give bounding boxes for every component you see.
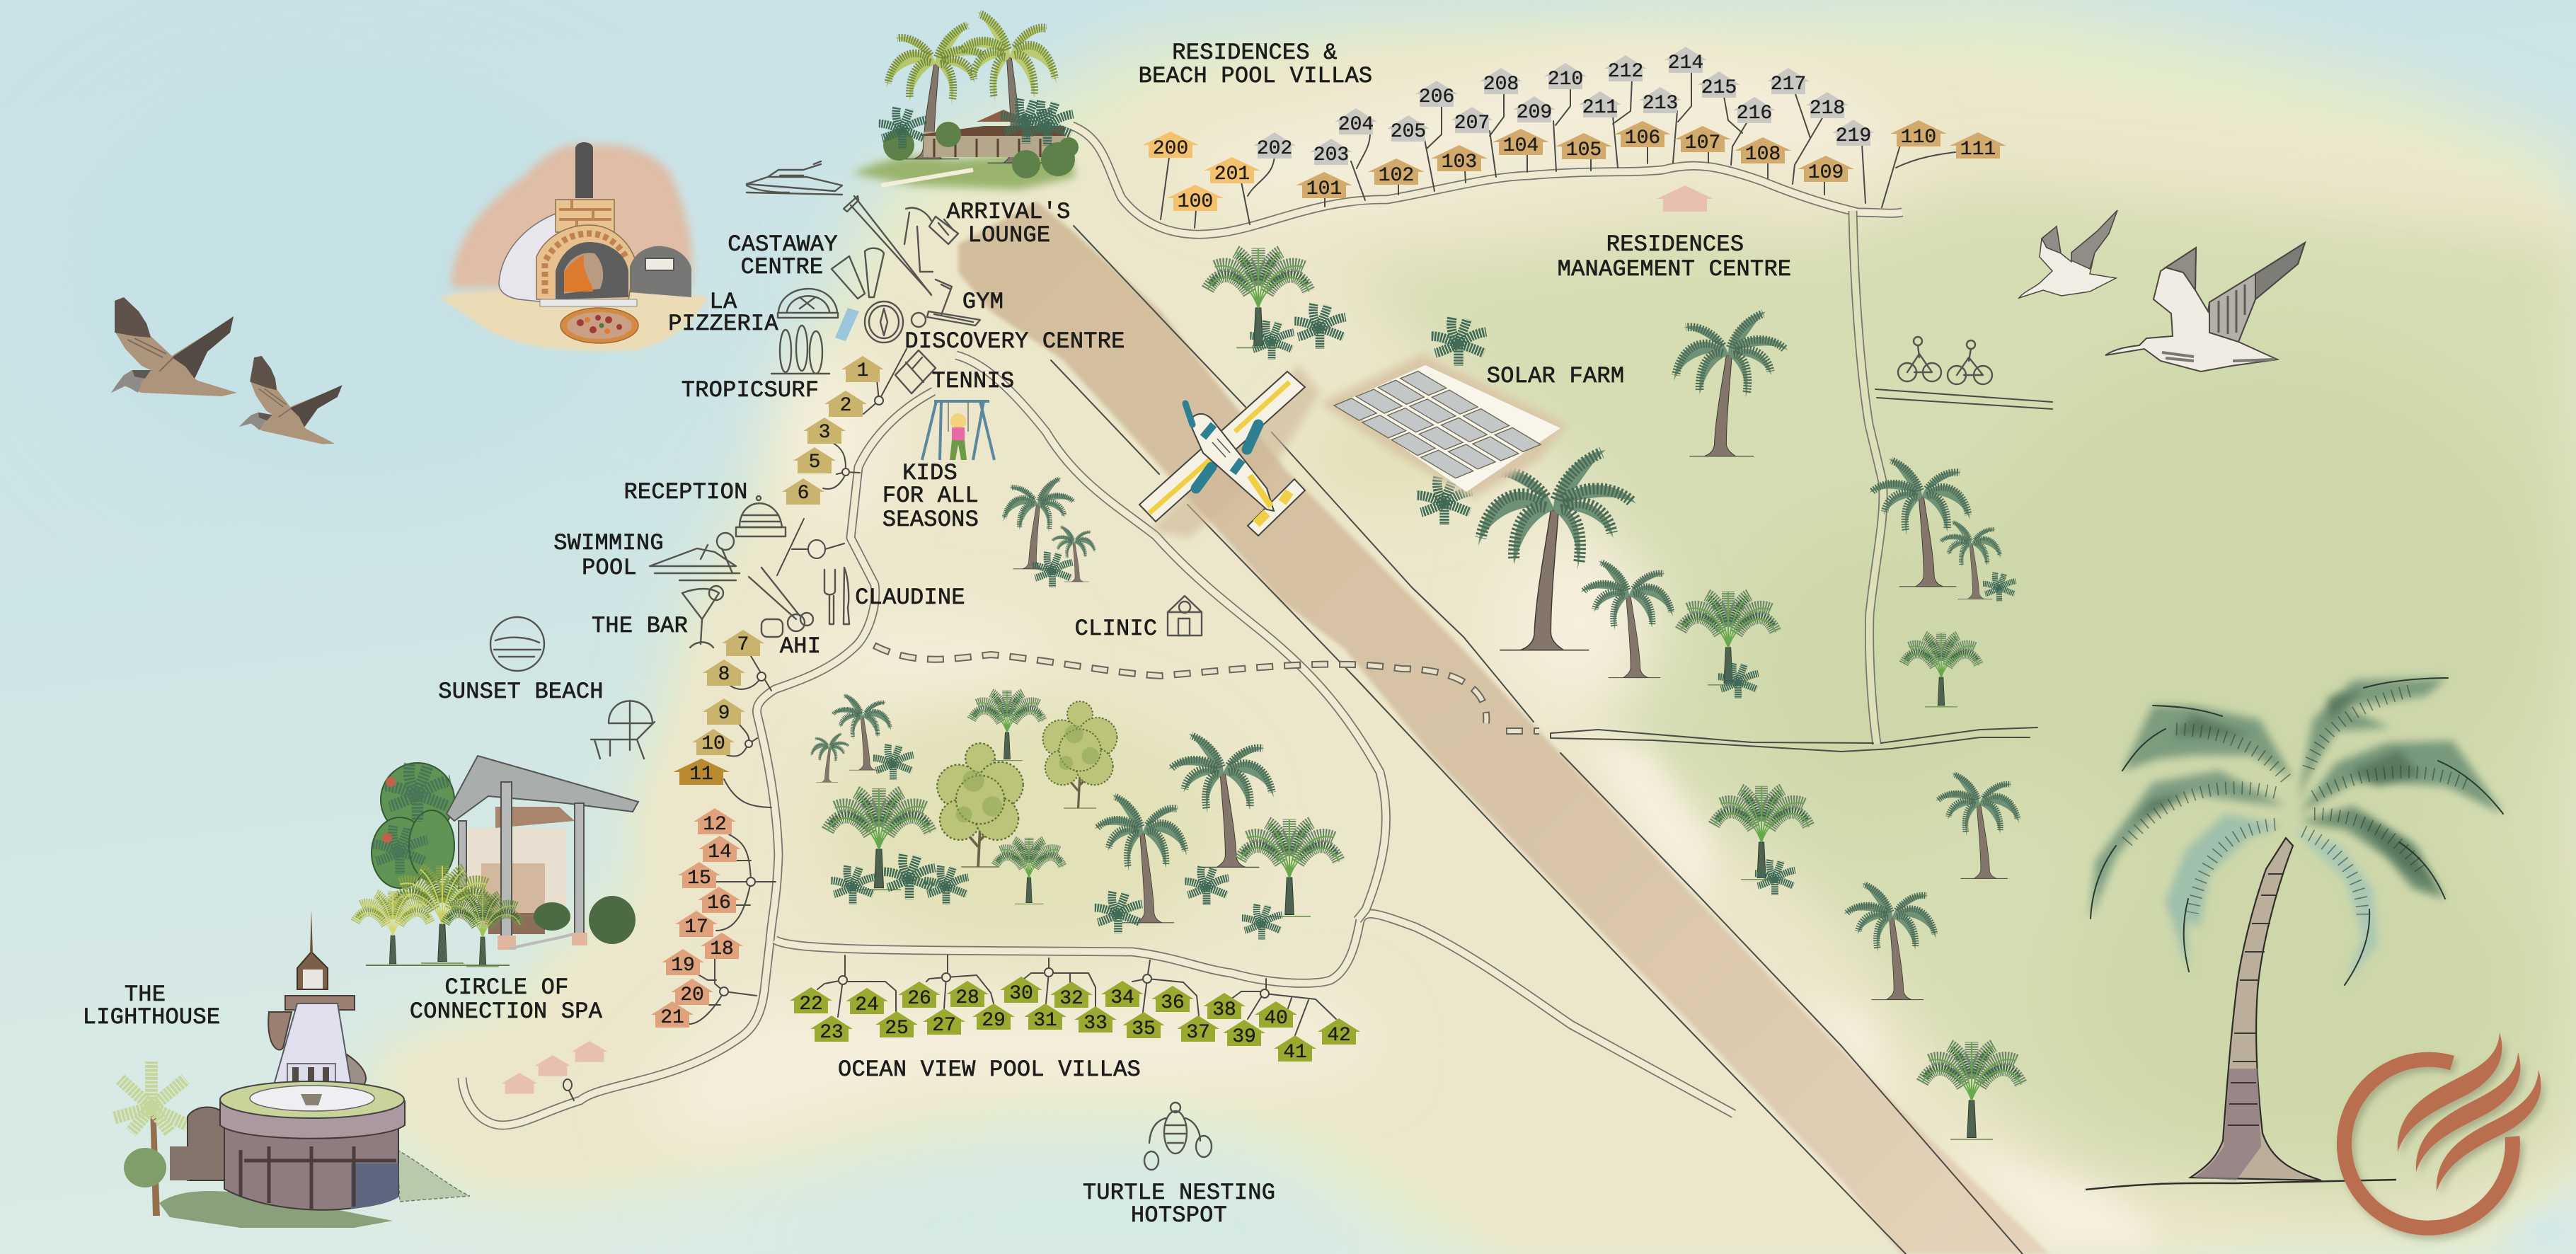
icon: gym treadmill xyxy=(927,280,980,326)
house markers: residences grey: 210 xyxy=(1548,69,1583,91)
blue water wash xyxy=(57,85,1415,1254)
house markers: beach pool villas: 200 xyxy=(1153,138,1188,160)
label: reception: RECEPTION xyxy=(623,479,748,505)
house markers: residences tan: 108 xyxy=(1745,144,1781,166)
oven smoke wash xyxy=(451,144,692,288)
house markers: spa villas salmon: 18 xyxy=(710,938,734,960)
house markers: residences grey: 205 xyxy=(1391,121,1426,143)
house markers: residences grey: 208 xyxy=(1483,74,1519,96)
residence villa markers xyxy=(1142,47,2006,213)
house markers: residences tan: 106 xyxy=(1625,127,1660,149)
ground line xyxy=(2086,1180,2396,1190)
dashed track xyxy=(874,645,1539,731)
oven sand wash xyxy=(439,287,708,351)
icon: beach umbrella and chair xyxy=(591,701,655,759)
house markers: spa villas salmon: 20 xyxy=(680,984,704,1006)
house markers: ocean view pool villas: 39 xyxy=(1232,1026,1256,1048)
bottom-right water xyxy=(2498,1196,2576,1254)
icon: reception bell xyxy=(736,496,786,536)
label: kids for all seasons: SEASONS xyxy=(882,507,979,533)
frond B xyxy=(2091,771,2286,919)
label: discovery centre: DISCOVERY CENTRE xyxy=(904,328,1125,355)
house markers: ocean view pool villas: 40 xyxy=(1264,1008,1288,1030)
lighthouse vegetation xyxy=(159,1191,393,1228)
icon: swim fins xyxy=(832,248,884,299)
la pizzeria oven illustration xyxy=(439,142,708,351)
road: to villa 111 xyxy=(1896,152,1955,168)
label: arrival's lounge xyxy=(946,199,1071,248)
house markers: beach villas gold: 3 xyxy=(819,422,830,444)
house markers: ocean view pool villas: 30 xyxy=(1009,983,1033,1005)
label: the lighthouse xyxy=(83,982,220,1030)
house markers: beach villas gold: 10 xyxy=(701,733,725,755)
wings xyxy=(1139,372,1305,522)
house markers: beach villas gold: 8 xyxy=(718,664,730,686)
house markers: lighthouse cottages xyxy=(501,1041,607,1094)
label: ocean view pool villas: OCEAN VIEW POOL VILLAS xyxy=(838,1057,1141,1083)
icon: chopsticks and sushi xyxy=(749,568,813,637)
house markers: beach pool villas: 100 xyxy=(1178,191,1213,213)
label: la pizzeria: PIZZERIA xyxy=(668,311,778,337)
house markers: residences grey xyxy=(1253,47,1875,166)
ocean villa leader lines xyxy=(817,955,1336,1035)
green inland wash xyxy=(1345,184,2576,1203)
house markers: ocean view pool villas: 42 xyxy=(1327,1025,1351,1047)
house markers: residences grey: 211 xyxy=(1582,97,1618,119)
road network xyxy=(462,126,2052,1125)
house marker: 11 xyxy=(673,759,730,786)
house markers: residences grey: 217 xyxy=(1771,74,1806,96)
house markers: residences tan: 101 xyxy=(1306,178,1342,200)
blue pool rectangle xyxy=(835,308,859,341)
plane shadow xyxy=(1150,364,1320,538)
fan palms xyxy=(827,248,2021,1139)
icon: compass xyxy=(865,301,926,343)
seaplane xyxy=(1139,364,1320,538)
label: arrival's lounge: ARRIVAL'S xyxy=(946,199,1071,225)
propeller xyxy=(1185,403,1192,425)
icon: tennis court xyxy=(895,350,936,393)
oven plinth xyxy=(540,299,637,306)
frond wash xyxy=(2091,678,2503,985)
solar farm ground xyxy=(1320,354,1568,499)
label: arrival's lounge: LOUNGE xyxy=(968,222,1050,248)
house markers: residences grey: 209 xyxy=(1517,102,1552,124)
house markers: spa villas salmon: 19 xyxy=(671,955,695,977)
label: circle of connection spa: CONNECTION SPA xyxy=(410,999,603,1025)
frond E xyxy=(2299,806,2445,899)
house markers: residences tan: 109 xyxy=(1808,162,1844,184)
label: residences management centre: RESIDENCES xyxy=(1606,231,1744,258)
label: circle of connection spa: CIRCLE OF xyxy=(444,974,569,1001)
label: the bar: THE BAR xyxy=(592,613,688,639)
road: east track xyxy=(1551,727,2037,752)
house markers: residences tan: 102 xyxy=(1379,165,1414,187)
pizza xyxy=(560,308,638,343)
house markers: ocean view pool villas: 34 xyxy=(1110,987,1134,1009)
label: residences and beach pool villas: BEACH POOL VILLAS xyxy=(1139,63,1372,89)
icon: paddle xyxy=(844,196,931,295)
house markers: ocean view pool villas: 32 xyxy=(1059,988,1083,1010)
icon: pool lounger xyxy=(650,533,740,580)
label: turtle nesting hotspot xyxy=(1083,1180,1275,1229)
road: central diagonal xyxy=(956,355,1386,920)
house markers: residences grey: 204 xyxy=(1338,114,1374,136)
label: the lighthouse: THE xyxy=(125,982,166,1008)
lounge building xyxy=(920,110,1065,157)
small drum xyxy=(188,1107,226,1180)
house markers: beach villas gold: 1 xyxy=(857,360,868,382)
birds: left pair xyxy=(111,297,347,447)
house markers: residences grey: 207 xyxy=(1454,113,1490,134)
house markers: ocean view pool villas: 23 xyxy=(820,1022,844,1044)
icon: turtles xyxy=(1144,1103,1212,1170)
label: solar farm: SOLAR FARM xyxy=(1487,363,1624,389)
fuselage xyxy=(1189,414,1274,511)
label: gym: GYM xyxy=(962,289,1004,315)
label: clinic: CLINIC xyxy=(1075,616,1157,642)
house markers: residences grey: 203 xyxy=(1313,144,1349,166)
label: swimming pool: POOL xyxy=(582,555,637,581)
frond D xyxy=(2293,829,2378,985)
label: claudine: CLAUDINE xyxy=(855,585,965,611)
label: circle of connection spa xyxy=(410,974,603,1025)
frond hatching xyxy=(2127,690,2470,920)
house markers: ocean view pool villas: 41 xyxy=(1283,1042,1307,1064)
arrivals lounge illustration xyxy=(852,12,1079,190)
deeper green right wash xyxy=(1734,347,2562,1154)
house markers: beach villas gold: 6 xyxy=(798,483,809,505)
road: cycle branch xyxy=(1875,389,2052,409)
spiral stair and balcony xyxy=(268,996,355,1049)
house markers: beach villas gold: 5 xyxy=(809,451,820,473)
label: kids for all seasons xyxy=(882,460,979,533)
big foreground palm xyxy=(2086,678,2503,1190)
icon: arrivals suitcase xyxy=(904,208,958,272)
label: castaway centre: CASTAWAY xyxy=(728,231,838,258)
spa tree xyxy=(372,763,454,888)
label: tropicsurf: TROPICSURF xyxy=(682,377,819,403)
coconut palms xyxy=(811,311,2019,1000)
left dome xyxy=(499,214,566,304)
house markers: beach villas gold: 9 xyxy=(718,703,730,725)
frond G xyxy=(2298,678,2446,803)
left forest wash xyxy=(821,403,1472,948)
house markers: ocean view pool villas: 27 xyxy=(932,1015,956,1037)
icon: surfboards xyxy=(771,326,829,374)
label: residences and beach pool villas xyxy=(1139,40,1372,89)
frond F xyxy=(2299,741,2503,814)
trunk xyxy=(2190,838,2321,1180)
house markers: residences tan xyxy=(1296,120,2006,200)
house markers: spa villas salmon: 14 xyxy=(708,841,732,863)
spa interior xyxy=(459,828,566,920)
label: swimming pool: SWIMMING xyxy=(553,530,664,556)
label: castaway centre: CENTRE xyxy=(741,254,823,280)
frond A xyxy=(2122,706,2293,778)
bird 1 xyxy=(111,297,237,396)
house markers: beach villas gold: 2 xyxy=(840,395,851,417)
leafy trees xyxy=(937,701,1117,867)
logo flames xyxy=(2398,1032,2502,1152)
icon: pizzeria arch xyxy=(778,289,838,318)
oven right door xyxy=(630,246,691,297)
house markers: residences tan: 105 xyxy=(1566,139,1602,161)
bird 2 xyxy=(238,355,347,447)
residence leader lines xyxy=(1161,71,1900,228)
house markers: residences tan: 104 xyxy=(1503,135,1539,157)
house markers: ocean view pool villas: 26 xyxy=(907,988,931,1010)
house markers: ocean view pool villas: 38 xyxy=(1212,999,1236,1021)
icon: martini xyxy=(682,586,723,648)
lounge shrubs xyxy=(883,122,1079,178)
house markers: ocean view pool villas: 31 xyxy=(1033,1010,1057,1032)
oven mouth with fire xyxy=(564,253,603,294)
road: west main xyxy=(462,391,933,1125)
label: sunset beach: SUNSET BEACH xyxy=(438,679,604,705)
small bushes xyxy=(831,304,2016,940)
dark frond shading xyxy=(2130,690,2434,888)
house marker: 11: 11 xyxy=(689,764,713,786)
house markers: residences tan: 103 xyxy=(1442,151,1477,173)
label: turtle nesting hotspot: HOTSPOT xyxy=(1131,1202,1227,1229)
the lighthouse illustration xyxy=(113,909,470,1228)
road: ocean villas xyxy=(775,914,1734,1114)
house markers: ocean view pool villas: 22 xyxy=(799,994,823,1016)
labels xyxy=(83,40,1791,1229)
brick block xyxy=(556,200,614,232)
house markers: beach villas gold: 7 xyxy=(737,634,749,656)
house markers: ocean view pool villas: 24 xyxy=(855,994,879,1016)
lounge palms xyxy=(886,23,990,159)
solar panels xyxy=(1334,372,1541,479)
oven door frame xyxy=(556,242,628,299)
icon: swing with child xyxy=(922,401,994,460)
frond C xyxy=(2166,814,2283,972)
chimney xyxy=(575,142,593,198)
house markers: spa villas salmon: 21 xyxy=(660,1007,684,1029)
icon: fork and knife xyxy=(824,568,849,624)
spa foliage xyxy=(393,866,492,963)
house markers: residences grey: 213 xyxy=(1643,93,1678,115)
solar farm xyxy=(1320,354,1568,499)
house markers: spa villas salmon: 15 xyxy=(687,868,711,890)
house markers: residences tan: 110 xyxy=(1901,127,1936,149)
house markers: residences tan: 107 xyxy=(1685,132,1720,154)
label: castaway centre xyxy=(728,231,838,280)
lollipop path marker xyxy=(563,1079,574,1100)
road: residences xyxy=(1072,126,1902,234)
house markers: beach pool villas: 201 xyxy=(1214,163,1250,185)
bird 4 xyxy=(2105,243,2305,372)
house markers: spa villas salmon: 16 xyxy=(707,892,731,914)
frond tip strands xyxy=(2091,678,2503,985)
house markers: spa villas salmon: 12 xyxy=(703,814,727,836)
brand logo xyxy=(2344,1032,2541,1228)
label: la pizzeria: LA xyxy=(710,289,737,315)
label: tennis: TENNIS xyxy=(932,368,1014,394)
brick arch xyxy=(536,225,635,301)
house markers: beach villas gold xyxy=(692,356,884,755)
house markers: ocean view pool villas: 29 xyxy=(982,1010,1006,1032)
label: residences management centre xyxy=(1558,231,1791,282)
house markers: residences grey: 218 xyxy=(1810,98,1845,120)
lighthouse small palm xyxy=(150,1104,160,1216)
house markers: residences grey: 206 xyxy=(1419,86,1454,108)
spa roof xyxy=(447,756,638,821)
house markers: residences grey: 214 xyxy=(1668,52,1703,74)
house markers: ocean view pool villas: 36 xyxy=(1161,992,1185,1014)
icon: boat xyxy=(747,161,842,195)
label: residences and beach pool villas: RESIDENCES & xyxy=(1172,40,1338,66)
house markers: ocean view pool villas: 25 xyxy=(885,1018,909,1040)
circle of connection spa illustration xyxy=(355,756,638,967)
label: the lighthouse: LIGHTHOUSE xyxy=(83,1004,220,1030)
house markers: residences tan: 111 xyxy=(1960,139,1996,161)
label: residences management centre: MANAGEMENT CENTRE xyxy=(1558,256,1791,282)
tailplane xyxy=(1248,479,1305,536)
house marker: residences management centre xyxy=(1657,185,1713,212)
house markers: residences grey: 212 xyxy=(1608,61,1643,83)
label: turtle nesting hotspot: TURTLE NESTING xyxy=(1083,1180,1275,1206)
house markers: ocean view pool villas xyxy=(790,977,1360,1064)
icon: clinic xyxy=(1168,596,1202,635)
house markers: ocean view pool villas: 28 xyxy=(955,987,979,1009)
icon: sunset beach xyxy=(490,617,544,671)
round base xyxy=(224,1125,398,1210)
house markers: ocean view pool villas: 37 xyxy=(1186,1022,1210,1044)
house markers: spa villas salmon xyxy=(651,808,743,1029)
pale cream patches xyxy=(637,64,1897,1146)
lounge lawn xyxy=(852,152,1076,190)
lantern and spire xyxy=(297,952,328,989)
icon: cyclists xyxy=(1898,337,1992,384)
label: kids for all seasons: KIDS xyxy=(902,460,958,486)
beach leader lines xyxy=(689,349,907,1024)
house markers: spa villas salmon: 17 xyxy=(684,916,708,938)
house markers: residences grey: 219 xyxy=(1836,125,1871,147)
house markers: ocean view pool villas: 35 xyxy=(1132,1018,1156,1040)
road: north-south east xyxy=(1853,211,1883,744)
house markers: ocean view pool villas: 33 xyxy=(1083,1013,1108,1035)
birds: right pair xyxy=(2019,210,2305,372)
label: la pizzeria xyxy=(668,289,778,337)
beach hubs xyxy=(720,396,883,996)
runway boundary lines xyxy=(1051,226,2023,1254)
cream strip beside runway xyxy=(1578,736,2151,1249)
spa pillars xyxy=(459,782,584,941)
label: kids for all seasons: FOR ALL xyxy=(882,483,979,509)
label: swimming pool xyxy=(553,530,664,581)
house markers: residences grey: 215 xyxy=(1701,77,1737,99)
label: ahi: AHI xyxy=(780,633,821,660)
lighthouse tower xyxy=(274,1003,351,1085)
house markers: residences grey: 216 xyxy=(1737,103,1772,125)
house markers: beach pool villas xyxy=(1142,132,1260,213)
bird 3 xyxy=(2019,210,2117,298)
house markers: residences grey: 202 xyxy=(1257,138,1292,160)
airstrip runway xyxy=(958,202,2049,1254)
logo ring xyxy=(2344,1059,2512,1228)
